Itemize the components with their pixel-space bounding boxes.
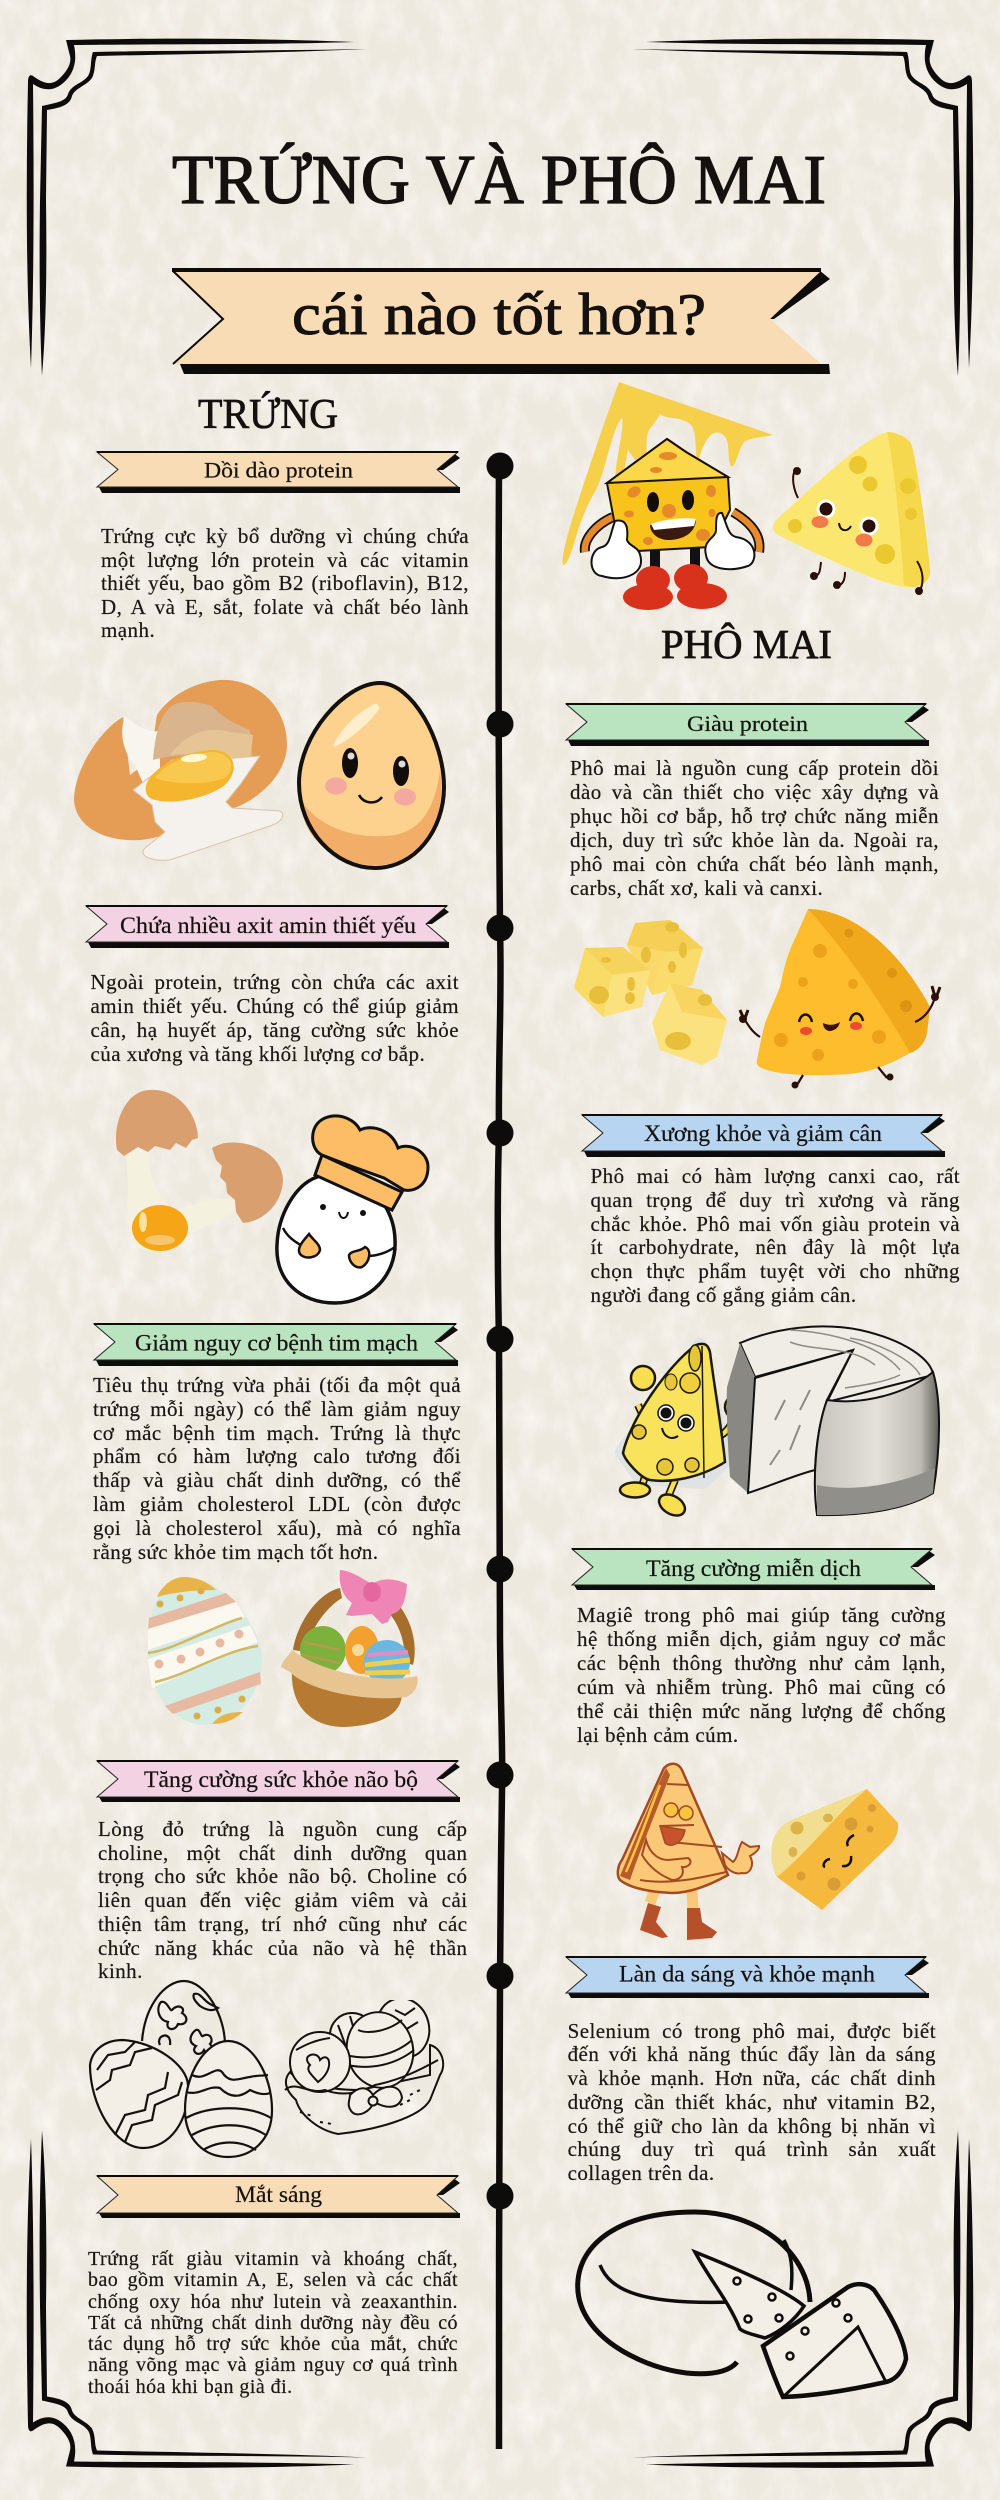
- text: bones and weight: ít carbohydrate, nên đây là một lựa: [590, 1235, 960, 1259]
- ribbon: Giảm nguy cơ bệnh tim mạch: Giảm nguy cơ bệnh tim mạch: [135, 1330, 419, 1356]
- icon: cheese cubes: [574, 920, 727, 1065]
- icon: waving cheese character: [615, 1338, 729, 1517]
- ribbon: Giảm nguy cơ bệnh tim mạch: [92, 1323, 458, 1366]
- text: skin: có thể giữ cho làn da không bị nhăn vì: [568, 2114, 936, 2138]
- ribbon: Mắt sáng: [96, 2175, 460, 2218]
- icon: orange cowboy cheese character: [615, 1760, 763, 1942]
- text: immunity: các bệnh thông thường như cảm lạnh,: [577, 1651, 946, 1675]
- icon: cute egg face: [297, 681, 446, 870]
- text: heart disease: gọi là cholesterol xấu), mà có nghĩa: [93, 1516, 461, 1540]
- subtitle ribbon: [172, 268, 830, 374]
- text: amino acids: Ngoài protein, trứng còn chứa các axit: [90, 970, 459, 994]
- icon: cracked eggs with yolk: [116, 1090, 283, 1252]
- text: immunity: lại bệnh cảm cúm.: [577, 1723, 739, 1747]
- text: egg protein: mạnh.: [101, 618, 155, 642]
- ribbon: Làn da sáng và khỏe mạnh: Làn da sáng và khỏe mạnh: [619, 1962, 876, 1986]
- text: cheese protein: dịch, duy trì sức khỏe làn da. Ngoài ra,: [570, 828, 939, 852]
- ribbon: Dồi dào protein: [96, 451, 460, 493]
- text: brain health: choline, một chất dinh dưỡng quan: [98, 1841, 468, 1865]
- text: brain health: [98, 1817, 468, 1983]
- ribbon: Giàu protein: Giàu protein: [687, 711, 808, 736]
- icon: engraved cheese wheel: [726, 1325, 940, 1516]
- text: brain health: chức năng khác của não và hệ thần: [98, 1936, 468, 1960]
- text: egg protein: [101, 524, 469, 642]
- ribbon: Làn da sáng và khỏe mạnh: [564, 1956, 929, 1998]
- text: bones and weight: chắc khỏe. Phô mai vốn giàu protein và: [590, 1212, 960, 1236]
- text: amino acids: của xương và tăng khối lượng cơ bắp.: [90, 1042, 425, 1066]
- timeline spine with dots: [486, 452, 514, 2449]
- icon: chef egg: [275, 1114, 430, 1305]
- text: skin: chúng duy trì quá trình sản xuất: [568, 2137, 936, 2161]
- text: skin: dưỡng cần thiết khác, như vitamin B2,: [568, 2090, 936, 2114]
- text: cheese protein: carbs, chất xơ, kali và canxi.: [570, 876, 823, 900]
- text: heart disease: rằng sức khỏe tim mạch tốt hơn.: [93, 1540, 378, 1564]
- icon: outline easter eggs: [88, 1979, 276, 2161]
- text: bones and weight: chọn thực phẩm tuyệt vời cho những: [590, 1259, 960, 1283]
- text: eyes: tác dụng hỗ trợ sức khỏe của mắt, chức: [88, 2333, 458, 2355]
- ribbon: Giàu protein: [564, 703, 929, 746]
- text: skin: [568, 2018, 936, 2185]
- ribbon: Tăng cường miễn dịch: [570, 1548, 935, 1590]
- text: skin: collagen trên da.: [568, 2161, 715, 2185]
- text: brain health: kinh.: [98, 1959, 143, 1983]
- text: cheese protein: dào và cần thiết cho việc xây dựng và: [570, 780, 939, 804]
- icon: outline cheese wheel with slices: [575, 2209, 909, 2403]
- text: immunity: cúm và nhiễm trùng. Phô mai cũng có: [577, 1675, 946, 1699]
- icon: smiling yellow cheese wedge: [772, 432, 930, 595]
- text: heart disease: Tiêu thụ trứng vừa phải (tối đa một quả: [93, 1373, 461, 1397]
- text: egg protein: một lượng lớn protein và các vitamin: [101, 548, 469, 572]
- ribbon: Tăng cường miễn dịch: Tăng cường miễn dịch: [646, 1556, 862, 1581]
- text: cheese protein: phô mai còn chứa chất béo lành mạnh,: [570, 852, 939, 876]
- text: eyes: [88, 2248, 458, 2398]
- ribbon: Chứa nhiều axit amin thiết yếu: Chứa nhiều axit amin thiết yếu: [120, 913, 417, 938]
- text: egg protein: Trứng cực kỳ bổ dưỡng vì chúng chứa: [101, 524, 469, 548]
- text: brain health: thiện tâm trạng, trí nhớ cũng như các: [98, 1912, 468, 1936]
- icon: outline easter basket: [282, 2000, 446, 2138]
- text: brain health: liên quan đến việc giảm viêm và cải: [98, 1888, 468, 1912]
- icon: yellow cheese block with face: [769, 1786, 902, 1912]
- decorative frame: top left corner: [26, 38, 366, 376]
- text: brain health: trọng cho sức khỏe não bộ. Choline có: [98, 1864, 468, 1888]
- text: cheese protein: [570, 756, 939, 900]
- text: immunity: Magiê trong phô mai giúp tăng cường: [577, 1603, 946, 1627]
- icon: cracked egg: [74, 680, 287, 861]
- decorative frame: bottom left corner: [26, 2130, 366, 2468]
- ribbon: Xương khỏe và giảm cân: [580, 1114, 945, 1157]
- heading: TRỨNG: TRỨNG: [198, 391, 338, 437]
- ribbon: Dồi dào protein: Dồi dào protein: [204, 458, 353, 482]
- text: bones and weight: quan trọng để duy trì xương và răng: [590, 1188, 960, 1212]
- ribbon: Chứa nhiều axit amin thiết yếu: [84, 905, 449, 948]
- text: skin: và khỏe mạnh. Hơn nữa, các chất dinh: [568, 2066, 936, 2090]
- text: cheese protein: phục hồi cơ bắp, hỗ trợ chức năng miễn: [570, 804, 939, 828]
- text: heart disease: [93, 1373, 461, 1564]
- text: heart disease: thấp và giàu chất dinh dưỡng, có thể: [93, 1468, 461, 1492]
- icon: patterned easter egg: [144, 1575, 264, 1729]
- text: heart disease: phẩm có hàm lượng calo tương đối: [93, 1444, 461, 1468]
- text: heart disease: cơ mắc bệnh tim mạch. Trứng là thực: [93, 1421, 461, 1445]
- ribbon: Tăng cường sức khỏe não bộ: [96, 1760, 460, 1802]
- text: amino acids: cân, hạ huyết áp, tăng cường sức khỏe: [90, 1018, 459, 1042]
- icon: easter basket with bow: [277, 1567, 421, 1731]
- icon: happy orange cheese wedge: [738, 909, 942, 1088]
- decorative frame: bottom right corner: [633, 2130, 974, 2468]
- text: bones and weight: người đang cố gắng giảm cân.: [590, 1283, 857, 1307]
- text: eyes: thoái hóa khi bạn già đi.: [88, 2376, 293, 2398]
- text: immunity: thể cải thiện mức năng lượng để chống: [577, 1699, 946, 1723]
- text: eyes: Tất cả những chất dinh dưỡng này đều có: [88, 2312, 458, 2334]
- text: heart disease: làm giảm cholesterol LDL (còn được: [93, 1492, 461, 1516]
- text: skin: đến với khả năng thúc đẩy làn da sáng: [568, 2042, 936, 2066]
- text: cheese protein: Phô mai là nguồn cung cấp protein dồi: [570, 756, 939, 780]
- icon: melting cheese mascot: [562, 382, 773, 610]
- subtitle ribbon: cái nào tốt hơn?: [292, 281, 706, 347]
- ribbon: Tăng cường sức khỏe não bộ: Tăng cường sức khỏe não bộ: [144, 1767, 418, 1792]
- text: brain health: Lòng đỏ trứng là nguồn cung cấp: [98, 1817, 468, 1841]
- text: eyes: năng võng mạc và giảm nguy cơ quá trình: [88, 2354, 458, 2376]
- text: egg protein: thiết yếu, bao gồm B2 (riboflavin), B12,: [101, 571, 469, 595]
- ribbon: Mắt sáng: Mắt sáng: [235, 2182, 323, 2207]
- ribbon: Xương khỏe và giảm cân: Xương khỏe và giảm cân: [644, 1121, 883, 1146]
- decorative frame: top right corner: [634, 38, 974, 376]
- text: immunity: hệ thống miễn dịch, giảm nguy cơ mắc: [577, 1627, 946, 1651]
- text: skin: Selenium có trong phô mai, được biết: [568, 2018, 936, 2042]
- text: eyes: Trứng rất giàu vitamin và khoáng chất,: [88, 2248, 458, 2270]
- text: heart disease: trứng mỗi ngày) có thể làm giảm nguy: [93, 1397, 461, 1421]
- text: amino acids: [90, 970, 459, 1066]
- text: eyes: bao gồm vitamin A, E, selen và các chất: [88, 2269, 458, 2291]
- text: bones and weight: [590, 1164, 960, 1307]
- text: bones and weight: Phô mai có hàm lượng canxi cao, rất: [590, 1164, 960, 1188]
- heading: PHÔ MAI: PHÔ MAI: [661, 621, 832, 667]
- text: amino acids: amin thiết yếu. Chúng có thể giúp giảm: [90, 994, 459, 1018]
- text: eyes: chống oxy hóa như lutein và zeaxanthin.: [88, 2291, 458, 2313]
- text: immunity: [577, 1603, 946, 1747]
- text: egg protein: D, A và E, sắt, folate và chất béo lành: [101, 595, 469, 619]
